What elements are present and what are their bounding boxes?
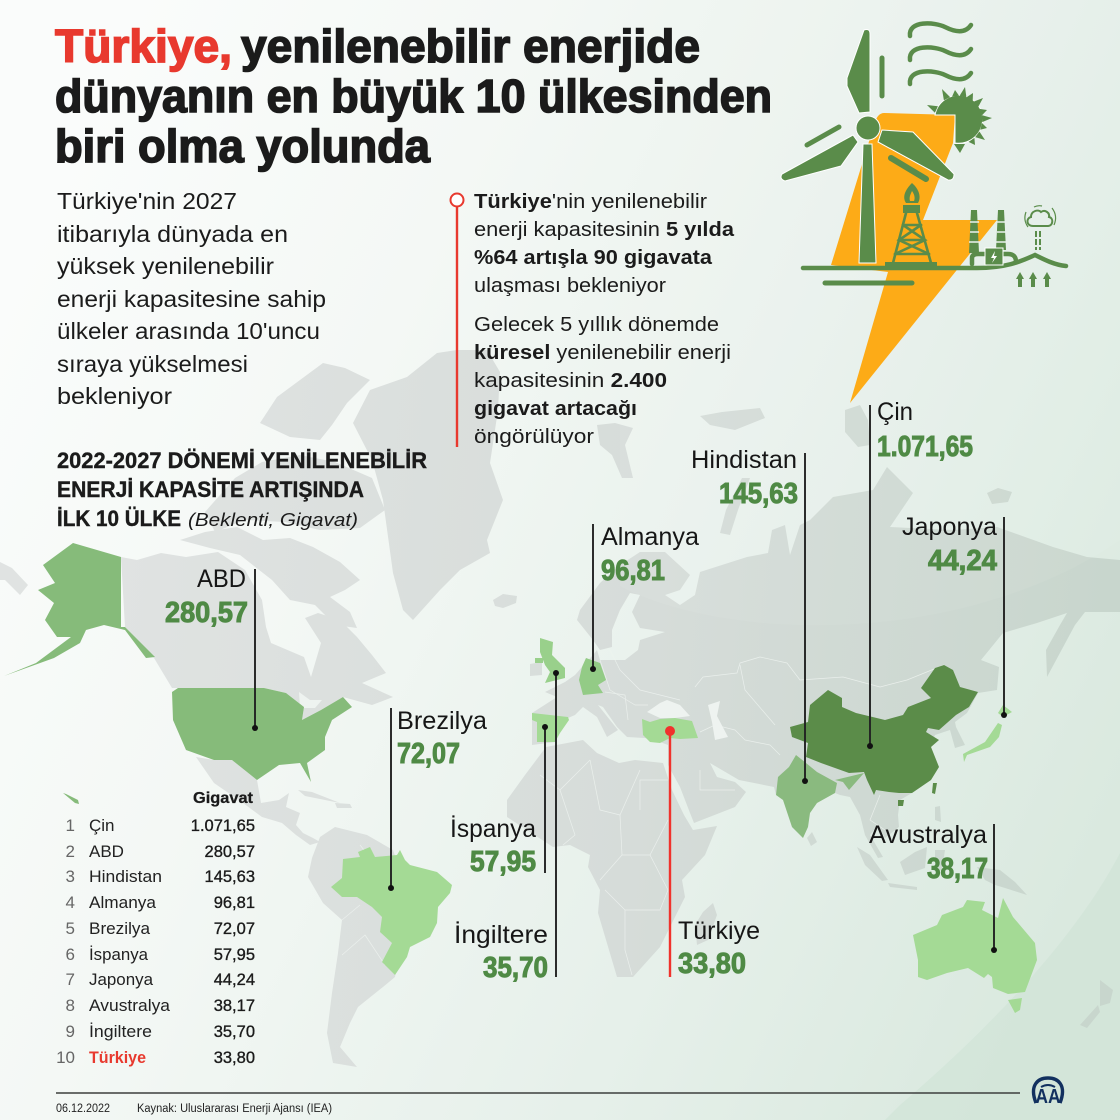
- label: Hindistan: [691, 446, 798, 510]
- ranking table: [56, 790, 255, 1067]
- label: Hindistan: 145,63: [719, 478, 798, 510]
- label: Türkiye: Türkiye: [678, 917, 760, 945]
- map: Japan: [963, 705, 1012, 762]
- logo: AA: [1034, 1078, 1062, 1108]
- icon: wind ticks: [807, 58, 926, 179]
- row 1: [66, 816, 255, 835]
- label: İspanya: 57,95: [470, 846, 536, 878]
- heading: top 10 countries: 2022-2027 DÖNEMİ YENİLENEBİLİR: [57, 448, 427, 473]
- label: Brezilya: 72,07: [397, 738, 460, 770]
- row 7: 44,24: [214, 971, 255, 989]
- text block: key figures: gigavat artacağı: [474, 398, 637, 420]
- map: Hawaii: [63, 793, 79, 804]
- text block: intro: itibarıyla dünyada en: [57, 221, 288, 247]
- icon: wind turbine: [781, 30, 954, 263]
- text block: key figures: %64 artışla 90 gigavata: [474, 247, 713, 269]
- text block: key figures: kapasitesinin 2.400: [474, 370, 667, 392]
- footer: date and source: Kaynak: Uluslararası Enerji Ajansı (IEA): [137, 1103, 332, 1115]
- label: Brezilya: Brezilya: [397, 707, 487, 735]
- icon: geothermal up arrows: [1016, 272, 1051, 287]
- heading: top 10 countries: ENERJİ KAPASİTE ARTIŞINDA: [57, 477, 364, 502]
- row 1: 1.071,65: [191, 817, 255, 835]
- map: Alaska: [4, 543, 155, 676]
- row 3: [66, 867, 255, 886]
- label: İngiltere: [454, 920, 548, 984]
- title: dünyanın en büyük 10 ülkesinden: [55, 70, 772, 122]
- label: Japonya: [902, 513, 997, 577]
- row 5: [66, 919, 255, 938]
- row 6: [66, 945, 255, 964]
- row 3: Hindistan: [89, 867, 162, 886]
- label: Almanya: 96,81: [601, 555, 665, 587]
- row 3: 3: [66, 867, 75, 886]
- row 8: [66, 996, 255, 1015]
- table header: Gigavat: [193, 790, 253, 807]
- row 10: [56, 1048, 255, 1067]
- footer: date and source: 06.12.2022: [56, 1103, 110, 1115]
- icon: lightning bolt: [831, 113, 997, 403]
- label: ABD: 280,57: [165, 597, 248, 629]
- text block: intro: enerji kapasitesine sahip: [57, 286, 326, 312]
- label: İngiltere: 35,70: [483, 952, 548, 984]
- icon: cloud and steam: [1025, 206, 1056, 250]
- row 8: 8: [66, 996, 75, 1015]
- map: China: [790, 665, 978, 806]
- row 10: 33,80: [214, 1049, 255, 1067]
- callout: red line with ring: [450, 194, 464, 447]
- label: ABD: [165, 565, 248, 629]
- title: yenilenebilir enerjide: [241, 20, 700, 72]
- map: country borders: [342, 650, 944, 975]
- leader lines and dots: [252, 405, 1007, 977]
- row 4: 4: [66, 893, 75, 912]
- red leader: Türkiye: [665, 726, 675, 977]
- row 7: Japonya: [89, 970, 154, 989]
- map: India: [776, 755, 864, 838]
- text block: key figures: Türkiye 'nin yenilenebilir: [474, 191, 707, 213]
- row 2: 2: [66, 842, 75, 861]
- light overlay on northern map: [620, 0, 1120, 625]
- text block: key figures: öngörülüyor: [474, 426, 594, 448]
- row 1: 1: [66, 816, 75, 835]
- label: Türkiye: 33,80: [678, 948, 746, 980]
- row 9: 35,70: [214, 1023, 255, 1041]
- footer: date and source: [56, 1103, 332, 1115]
- label: Çin: [877, 398, 973, 463]
- map: inland seas: [299, 692, 728, 740]
- title: biri olma yolunda: [55, 120, 430, 172]
- label: ABD: ABD: [197, 565, 246, 593]
- icon: ground lines: [803, 255, 1066, 283]
- row 2: ABD: [89, 842, 124, 861]
- map: grey land: [0, 350, 1120, 1067]
- label: İngiltere: İngiltere: [454, 920, 548, 949]
- row 2: [66, 842, 255, 861]
- text block: intro: sıraya yükselmesi: [57, 351, 248, 377]
- title: [55, 20, 772, 172]
- heading: top 10 countries: (Beklenti, Gigavat): [188, 509, 358, 530]
- text block: key figures: enerji kapasitesinin 5 yılda: [474, 219, 735, 241]
- label: Türkiye: [678, 917, 760, 980]
- row 5: 72,07: [214, 920, 255, 938]
- map: Spain: [532, 713, 569, 742]
- row 9: İngiltere: [89, 1022, 152, 1041]
- row 9: 9: [66, 1022, 75, 1041]
- label: Hindistan: Hindistan: [691, 446, 797, 474]
- label: İspanya: [450, 814, 536, 878]
- label: Avustralya: Avustralya: [869, 821, 987, 849]
- text block: intro: ülkeler arasında 10'uncu: [57, 318, 320, 344]
- text block: intro: yüksek yenilenebilir: [57, 253, 274, 279]
- label: Çin: Çin: [877, 398, 913, 426]
- text block: intro: Türkiye'nin 2027: [57, 188, 237, 214]
- row 4: 96,81: [214, 894, 255, 912]
- label: Japonya: Japonya: [902, 513, 997, 541]
- label: Avustralya: [869, 821, 988, 885]
- label: Çin: 1.071,65: [877, 431, 973, 463]
- row 1: Çin: [89, 816, 115, 835]
- text block: key figures: [474, 191, 735, 448]
- row 10: Türkiye: [89, 1048, 146, 1067]
- icon: wind waves: [910, 23, 971, 84]
- label: Avustralya: 38,17: [927, 853, 988, 885]
- title: Türkiye,: [55, 20, 232, 72]
- row 8: 38,17: [214, 997, 255, 1015]
- text block: key figures: ulaşması bekleniyor: [474, 275, 666, 297]
- row 6: 57,95: [214, 946, 255, 964]
- icon: power plant: [969, 210, 1016, 265]
- icon: sun: [927, 87, 992, 153]
- label: Almanya: [601, 523, 699, 587]
- footer rule: [56, 1092, 1020, 1094]
- text block: key figures: Gelecek 5 yıllık dönemde: [474, 314, 719, 336]
- map: United States: [172, 688, 352, 782]
- heading: top 10 countries: [57, 448, 427, 531]
- row 8: Avustralya: [89, 996, 171, 1015]
- row 7: [66, 970, 255, 989]
- label: İspanya: İspanya: [450, 814, 536, 843]
- illustration: renewable energy: [781, 23, 1066, 403]
- map: United Kingdom: [535, 638, 565, 683]
- heading: top 10 countries: İLK 10 ÜLKE: [57, 506, 181, 531]
- label: Brezilya: [397, 707, 487, 770]
- map: Türkiye: [642, 718, 698, 743]
- map: Australia: [913, 898, 1037, 1013]
- map: Germany: [579, 658, 606, 695]
- text block: key figures: küresel yenilenebilir enerji: [474, 342, 731, 364]
- label: Almanya: Almanya: [601, 523, 699, 551]
- text block: intro: [57, 188, 326, 409]
- map: Brazil: [331, 847, 452, 975]
- row 6: 6: [66, 945, 75, 964]
- row 3: 145,63: [205, 868, 255, 886]
- row 6: İspanya: [89, 945, 149, 964]
- icon: oil derrick: [885, 183, 937, 267]
- row 10: 10: [56, 1048, 75, 1067]
- logo: AA: AA: [1036, 1086, 1060, 1108]
- row 4: [66, 893, 255, 912]
- row 2: 280,57: [205, 843, 255, 861]
- label: Japonya: 44,24: [928, 545, 997, 577]
- text block: intro: bekleniyor: [57, 383, 172, 409]
- row 5: 5: [66, 919, 75, 938]
- row 4: Almanya: [89, 893, 157, 912]
- row 9: [66, 1022, 255, 1041]
- row 5: Brezilya: [89, 919, 151, 938]
- row 7: 7: [66, 970, 75, 989]
